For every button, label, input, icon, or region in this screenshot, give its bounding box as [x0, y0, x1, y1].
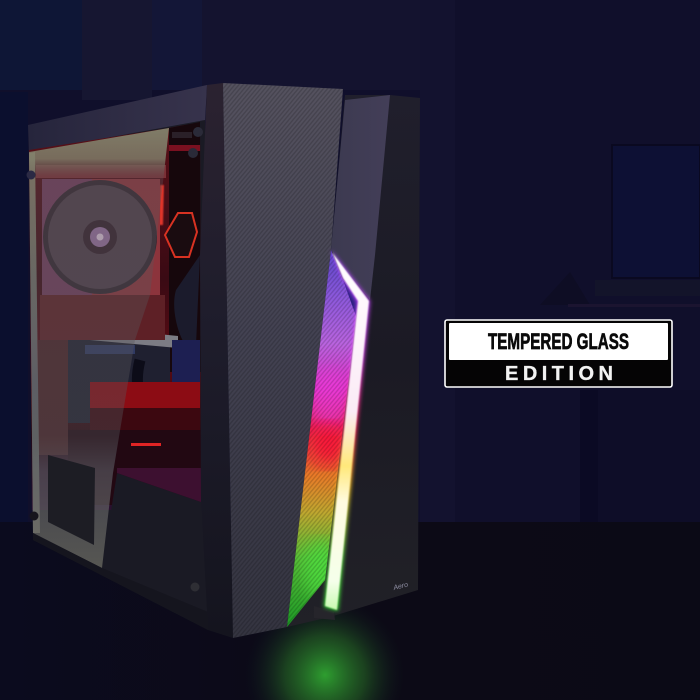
- graphics card: [68, 338, 170, 423]
- glass screws: [26, 127, 203, 592]
- case top panel: [28, 85, 207, 153]
- table: [0, 522, 700, 700]
- led strip glow: [324, 250, 370, 611]
- led strip: [325, 252, 369, 610]
- inner dark notch: [343, 280, 358, 316]
- case foot: [314, 606, 335, 620]
- front panel left band: [200, 83, 233, 638]
- case bottom rail: [33, 533, 208, 630]
- front mesh panel: [223, 83, 343, 638]
- case side body: [29, 120, 208, 630]
- left side wall behind glass: [38, 340, 68, 455]
- fan bracket: [42, 179, 160, 295]
- top wall glow behind glass: [36, 165, 166, 178]
- front right dark panel: [287, 95, 420, 627]
- badge: tempered glass edition: [445, 320, 672, 387]
- front right upper facet: [331, 95, 390, 300]
- floor light reflection: [245, 595, 405, 700]
- fan: [43, 180, 157, 294]
- pc case: [26, 83, 420, 638]
- power supply shroud: [48, 455, 95, 545]
- shelf: [595, 280, 700, 296]
- case interior: [29, 122, 202, 510]
- badge heading: TEMPERED GLASS: [488, 329, 629, 354]
- tempered glass pane: [29, 128, 169, 568]
- badge subheading: EDITION: [505, 363, 613, 385]
- monitor on wall: [612, 145, 700, 278]
- glass left edge: [29, 152, 40, 533]
- rgb lit mesh: [287, 250, 358, 627]
- badge top panel: [449, 323, 668, 360]
- logo mark: Aero: [392, 582, 409, 592]
